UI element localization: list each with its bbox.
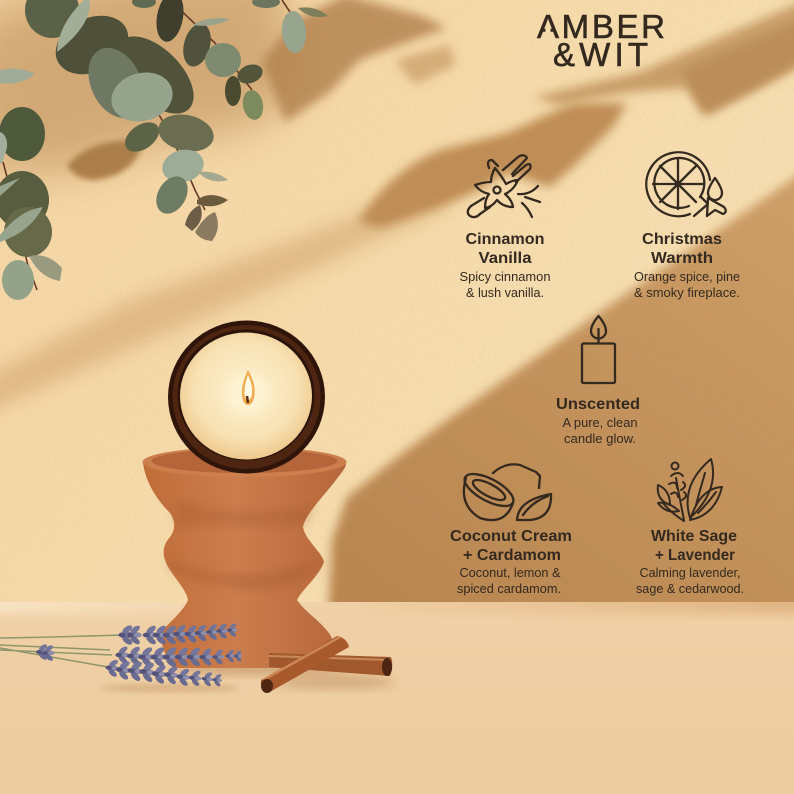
scent: Coconut Cream + Cardamom	[450, 464, 572, 596]
scent: Cinnamon Vanilla: Spicy cinnamon	[460, 269, 550, 284]
brand logo	[537, 8, 665, 73]
scent: Coconut Cream + Cardamom: Coconut, lemon &	[460, 565, 561, 580]
scent: Unscented: candle glow.	[564, 431, 636, 446]
brand logo: &WIT	[553, 36, 648, 73]
amber candle jar	[168, 320, 325, 474]
scent: White Sage + Lavender	[636, 459, 744, 596]
leaves	[25, 0, 79, 38]
clay pedestal	[142, 447, 346, 668]
scent: Unscented: A pure, clean	[562, 415, 638, 430]
icon: coconut and cardamom	[460, 464, 551, 520]
scent: White Sage + Lavender: Calming lavender,	[640, 565, 740, 580]
scent: Christmas Warmth: & smoky fireplace.	[634, 285, 740, 300]
object shadows on floor	[100, 661, 395, 692]
scent: White Sage + Lavender: White Sage	[651, 528, 737, 545]
scent: Christmas Warmth: Orange spice, pine	[634, 269, 740, 284]
scent: Coconut Cream + Cardamom: + Cardamom	[463, 547, 561, 564]
scent: Cinnamon Vanilla: Vanilla	[478, 250, 532, 267]
scent: Christmas Warmth	[634, 152, 740, 300]
cinnamon sticks	[261, 636, 392, 693]
scent: Cinnamon Vanilla: Cinnamon	[466, 231, 544, 248]
scent: Cinnamon Vanilla	[460, 155, 550, 300]
eucalyptus branch	[0, 0, 328, 300]
scent: Unscented	[556, 316, 640, 446]
scent: White Sage + Lavender: + Lavender	[655, 547, 735, 564]
brand logo: AMBER	[537, 8, 665, 45]
wall shadows	[0, 0, 794, 625]
icon: sage and lavender	[658, 459, 722, 521]
scent: Christmas Warmth: Warmth	[651, 250, 713, 267]
lavender sprigs	[0, 622, 243, 688]
scent: Coconut Cream + Cardamom: spiced cardamom.	[457, 581, 561, 596]
scent: Christmas Warmth: Christmas	[642, 231, 722, 248]
background: plaster wall	[0, 0, 794, 603]
wall texture	[0, 0, 794, 603]
floor surface	[0, 590, 794, 794]
candle flame	[226, 370, 270, 415]
icon: orange slice, drop and log	[646, 152, 726, 216]
scent: White Sage + Lavender: sage & cedarwood.	[636, 581, 744, 596]
scent: Cinnamon Vanilla: & lush vanilla.	[466, 285, 544, 300]
scent: Coconut Cream + Cardamom: Coconut Cream	[450, 528, 572, 545]
scent: Unscented: Unscented	[556, 396, 640, 413]
icon: candle	[582, 316, 615, 383]
icon: vanilla flower and cinnamon	[468, 155, 540, 217]
